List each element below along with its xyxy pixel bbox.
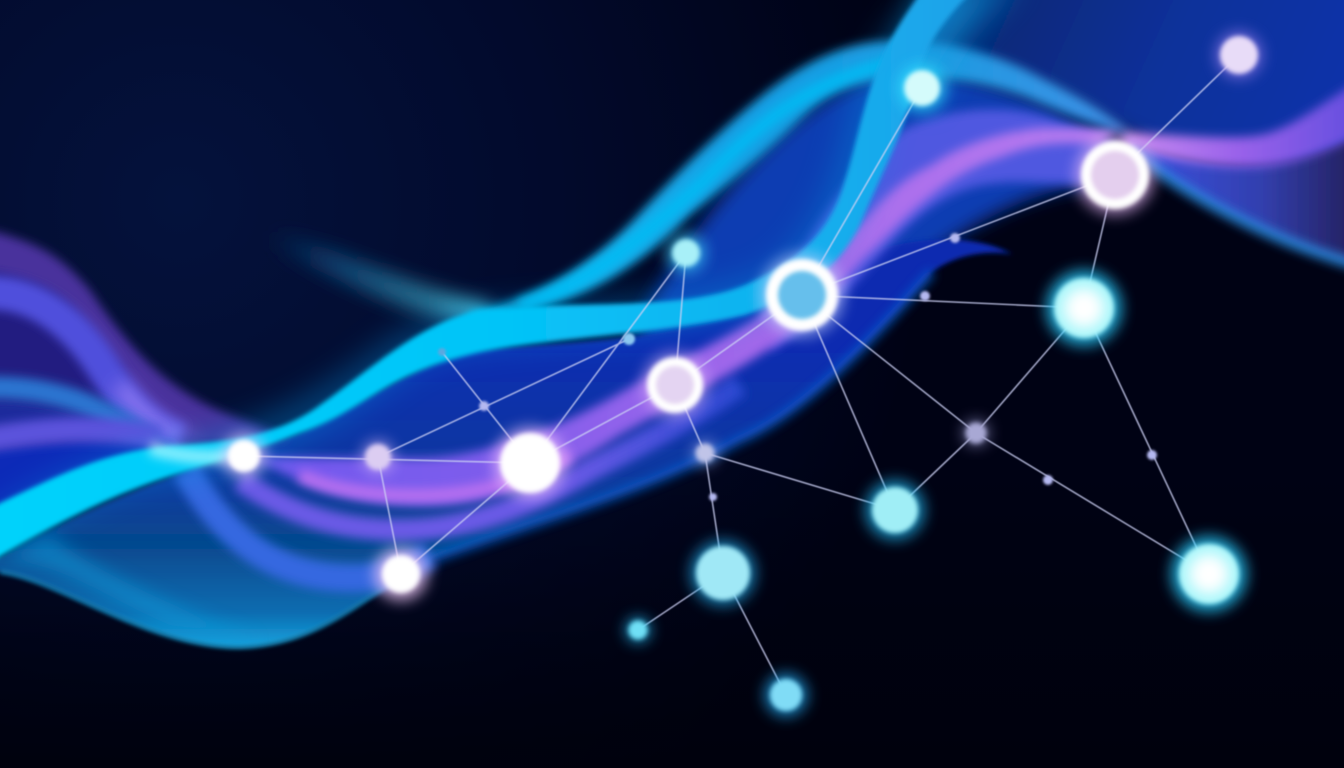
- node: cyan middle: [865, 480, 925, 540]
- ribbon: violet highlight on indigo strand: [120, 385, 190, 442]
- ribbon: cyan soft glow: [0, 0, 950, 530]
- ribbon: lilac main: [250, 128, 1120, 505]
- node: lavender small left: [361, 440, 395, 474]
- ribbon: left deep blue field: [0, 438, 180, 530]
- node: lavender ring: [642, 352, 708, 418]
- node: white left: [222, 434, 266, 478]
- ribbon: left indigo strand: [0, 290, 180, 440]
- node: bright cyan lower right: [1171, 536, 1247, 612]
- node: white large: [494, 427, 566, 499]
- ribbon: lower blue loop: [186, 470, 430, 578]
- ribbon: faint teal strand: [270, 228, 490, 328]
- node: cyan lower: [690, 540, 756, 606]
- node: grey junction right: [962, 419, 990, 447]
- ribbon: top glow near the rising cyan: [900, 0, 1020, 110]
- node: central blue ring: [760, 253, 844, 337]
- node: small cyan: [666, 233, 706, 273]
- node: grey junction: [692, 440, 718, 466]
- ribbon: lower translucent body: [0, 239, 1012, 647]
- ribbon: left dim purple field: [0, 250, 245, 460]
- network connection lines: [244, 55, 1239, 695]
- ribbon: lower indigo loop: [240, 385, 740, 530]
- ribbon: indigo behind upper lilac: [760, 110, 1115, 350]
- ribbon: pink edge on lilac: [300, 455, 570, 496]
- ribbon: right purple band: [1120, 80, 1344, 167]
- ribbon: top right blue field: [920, 0, 1344, 166]
- node: top right lavender: [1215, 31, 1263, 79]
- ribbon: left purple strand: [0, 430, 160, 442]
- node: small cyan lower left: [625, 617, 651, 643]
- ribbon: upper cyan arc: [470, 41, 1130, 320]
- ribbon: main cyan with rising wedge: [0, 0, 985, 575]
- node: white lower left: [374, 547, 428, 601]
- node: cyan bottom: [764, 673, 808, 717]
- node: right bright cyan: [1046, 270, 1122, 346]
- small connector dots: [438, 233, 1157, 501]
- ribbon: left dark purple strand: [0, 228, 290, 445]
- node: top cyan: [898, 64, 946, 112]
- ribbon: lower right field: [1130, 140, 1344, 275]
- ribbon: blue field beneath the upper arc: [640, 70, 1120, 400]
- ribbon: blue fall to the lower right: [1130, 150, 1344, 266]
- ribbon: cyan crossing highlight: [150, 448, 240, 457]
- node: upper right ring: [1075, 135, 1155, 215]
- ribbon: left dim blue field: [0, 400, 150, 440]
- ribbon: left blue strand: [0, 387, 150, 440]
